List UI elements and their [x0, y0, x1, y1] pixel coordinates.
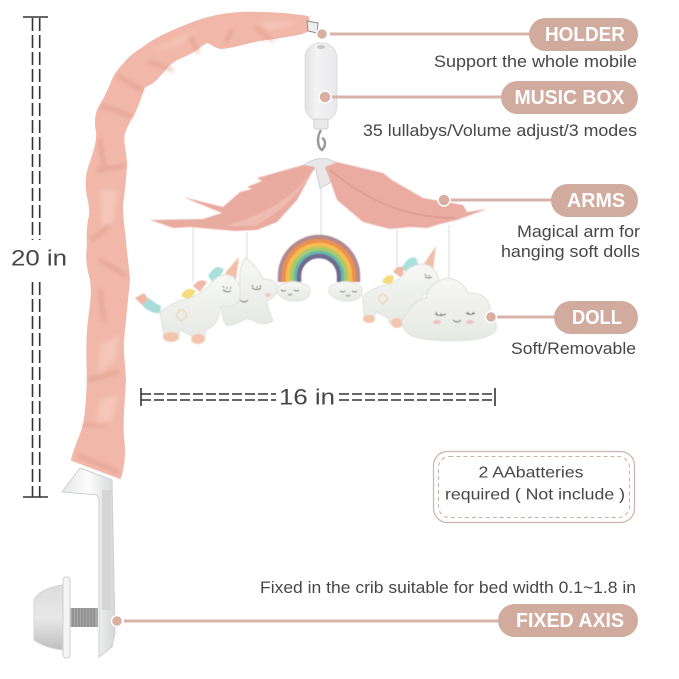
strings: [193, 188, 449, 282]
rainbow doll: [277, 237, 362, 301]
rainbow cloud faces: [277, 282, 362, 301]
feather arm: left: [150, 165, 315, 231]
callout: fixed axis: [112, 579, 638, 637]
note: batteries: [434, 452, 634, 522]
left unicorn doll: [135, 257, 240, 344]
fabric covered mobile arm: [72, 13, 310, 478]
callout: arms: [438, 184, 641, 261]
star doll: [220, 258, 277, 325]
crib clamp with knob and screw: [34, 468, 115, 658]
callout: fixed axis: Fixed in the crib suitable for bed width 0.1~1.8 in: [260, 579, 636, 597]
callout: doll: DOLL: [572, 307, 622, 329]
width dimension: 16 in: [141, 384, 495, 410]
feather arm: right: [325, 162, 487, 229]
callout: music box: MUSIC BOX: [514, 87, 625, 109]
right unicorn doll: [363, 246, 439, 328]
callout: arms: ARMS: [567, 190, 625, 212]
callout: music box: 35 lullabys/Volume adjust/3 modes: [363, 122, 637, 140]
music box: [304, 43, 340, 188]
note: batteries: 2 AAbatteries: [478, 464, 584, 482]
holder clip at arm tip: [307, 21, 318, 33]
callout: fixed axis: FIXED AXIS: [516, 610, 624, 632]
cloud doll: [402, 278, 496, 340]
callout: music box: [319, 81, 638, 140]
callout: holder: HOLDER: [545, 24, 626, 46]
note: batteries: required ( Not include ): [445, 486, 625, 504]
callout: holder: Support the whole mobile: [434, 53, 637, 71]
callout: arms: Magical arm for: [517, 223, 641, 241]
height dimension: 20 in: 20 in: [11, 246, 67, 270]
height dimension: 20 in: [11, 17, 67, 497]
width dimension: 16 in: 16 in: [279, 384, 335, 410]
callout: doll: [486, 301, 638, 358]
callout: doll: Soft/Removable: [511, 340, 636, 358]
callout: holder: [316, 18, 638, 71]
callout: arms: hanging soft dolls: [501, 243, 640, 261]
